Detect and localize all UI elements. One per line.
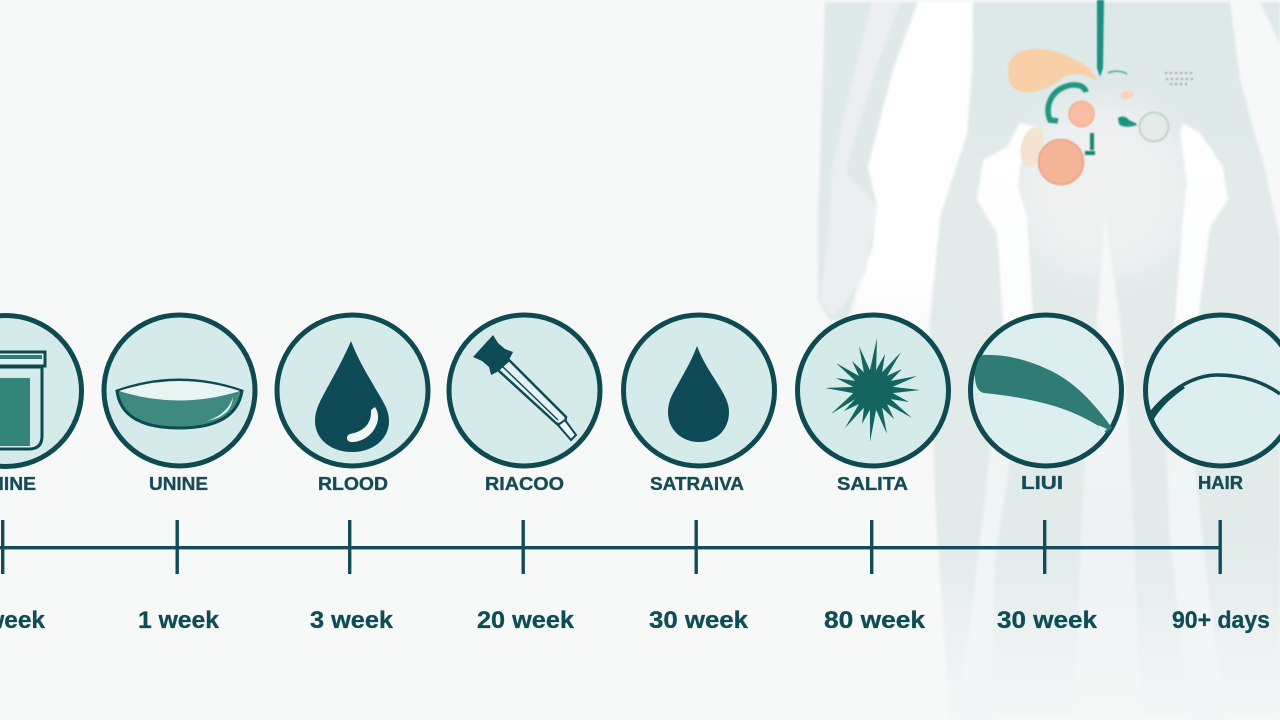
organ: gallbladder [1008,49,1097,92]
dropper tube [498,360,566,424]
circle [104,315,255,466]
band tip [1098,425,1107,433]
organ: small orange blob [1120,91,1134,99]
duration: 30 week [997,607,1098,634]
duration: 1 week [138,607,220,634]
organ: dotted tissue [1165,73,1195,84]
icon: bowl [104,315,255,466]
duration labels [0,607,1270,634]
circle [1146,315,1280,466]
tick [176,520,179,574]
body silhouette [818,2,1280,720]
drop highlight [347,407,378,442]
organ: thin teal branch [1108,71,1127,74]
lid band [0,355,42,359]
band [975,355,1112,433]
icon: blood drop [277,315,428,466]
label: SATRAIVA [650,474,744,494]
gap between legs [1075,217,1140,720]
icon: hair strand [1146,315,1280,466]
central lighter area [1020,105,1190,275]
tick [1043,520,1046,574]
organ: faint lobe [1017,125,1047,169]
right arm [1260,2,1280,44]
organ: small round [1069,102,1094,126]
label: LIUI [1021,473,1063,493]
sample type labels [0,473,1243,494]
jar outline [0,367,42,449]
circle [0,316,82,466]
dropper bulb [473,335,513,375]
right femur [1165,123,1228,720]
duration: 30 week [649,607,749,634]
icon: saliva drop [624,315,774,466]
label: HAIR [1198,473,1243,493]
circle [277,315,428,466]
axis line [0,546,1220,549]
white space beside arm [850,2,973,340]
circle [449,315,600,466]
bowl highlight [207,397,233,421]
icon: burst [798,315,948,466]
label: SALITA [837,474,908,494]
jar lid [0,352,45,366]
organ: pale ring [1125,74,1139,86]
circle [970,315,1122,466]
icon: dropper [449,315,600,466]
tick [522,520,525,574]
tick [694,520,698,574]
label: RIACOO [485,474,564,494]
duration: 20 week [477,607,575,634]
strand [1150,375,1280,414]
bowl opening [119,381,240,400]
strand wedge [1149,385,1185,419]
duration: 3 week [310,607,394,634]
torso and legs [930,2,1280,720]
label: RLOOD [318,474,388,494]
tick [1218,520,1222,574]
left arm [818,2,918,320]
tick [1,520,4,574]
burst star [825,338,920,442]
organ: gray round [1140,112,1168,142]
icon: jar [0,316,82,466]
drop [315,341,389,452]
label: UNINE [149,474,208,494]
circle [624,315,774,466]
timeline [0,520,1222,574]
organ: central teal duct [1097,0,1104,77]
jar liquid [0,378,30,446]
organ: large round [1038,140,1084,184]
anatomical organs [1008,0,1195,184]
organ: teal blob [1118,117,1137,127]
bowl body [117,380,242,428]
organ: curved teal duct [1048,85,1086,121]
tick [870,520,873,574]
icon: liver band [970,315,1122,466]
left arm bone [820,2,900,315]
duration: 80 week [824,607,926,634]
tick [348,520,351,574]
dropper tip [558,420,576,440]
organ: small hook [1085,133,1095,153]
left femur [958,123,1037,720]
circle [798,315,948,466]
duration: 90+ days [1172,607,1270,634]
dropper inner line [502,366,558,420]
drop [668,346,729,442]
